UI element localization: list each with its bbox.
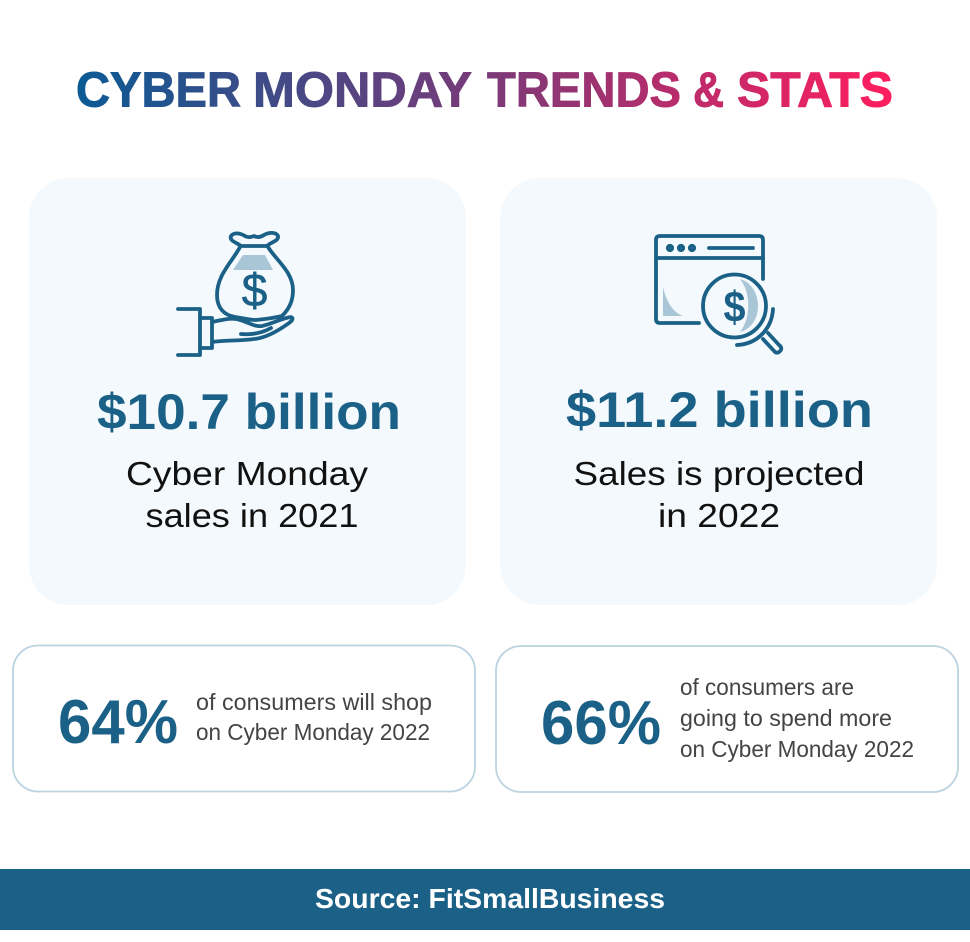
title bbox=[76, 64, 893, 118]
stat: 66%: 66% bbox=[541, 689, 661, 758]
icon: money bag in hand bbox=[178, 233, 293, 355]
source banner bbox=[0, 869, 970, 930]
title: CYBER bbox=[76, 64, 241, 118]
title: TRENDS bbox=[487, 64, 681, 118]
stat text: 66% bbox=[680, 674, 914, 762]
icon: browser with magnifier bbox=[656, 236, 781, 353]
source banner: Source: FitSmallBusiness bbox=[315, 883, 665, 914]
stat text: 64%: on Cyber Monday 2022 bbox=[196, 719, 430, 745]
sales description 2021: sales in 2021 bbox=[146, 497, 358, 534]
panel: 2022 projection bbox=[500, 178, 937, 605]
sales figure 2021: $10.7 billion bbox=[97, 384, 401, 440]
icon: browser with magnifier: $ bbox=[724, 283, 746, 332]
stat text: 66%: on Cyber Monday 2022 bbox=[680, 736, 914, 762]
sales description 2021 bbox=[126, 455, 369, 534]
panel: 2021 sales bbox=[29, 178, 466, 605]
callout: 66 percent bbox=[496, 646, 958, 792]
stat text: 64%: of consumers will shop bbox=[196, 689, 432, 715]
callout: 64 percent bbox=[13, 646, 475, 792]
sales description 2022 bbox=[574, 455, 864, 534]
title: & bbox=[693, 64, 724, 118]
stat text: 66%: of consumers are bbox=[680, 674, 854, 700]
stat text: 64% bbox=[196, 689, 432, 745]
sales description 2021: Cyber Monday bbox=[126, 455, 369, 492]
sales description 2022: in 2022 bbox=[658, 497, 780, 534]
icon: money bag in hand: $ bbox=[242, 264, 267, 316]
stat: 64%: 64% bbox=[58, 688, 178, 757]
title: MONDAY bbox=[253, 64, 472, 118]
title: STATS bbox=[737, 64, 893, 118]
sales description 2022: Sales is projected bbox=[574, 455, 864, 492]
stat text: 66%: going to spend more bbox=[680, 705, 892, 731]
sales figure 2022: $11.2 billion bbox=[566, 382, 873, 438]
